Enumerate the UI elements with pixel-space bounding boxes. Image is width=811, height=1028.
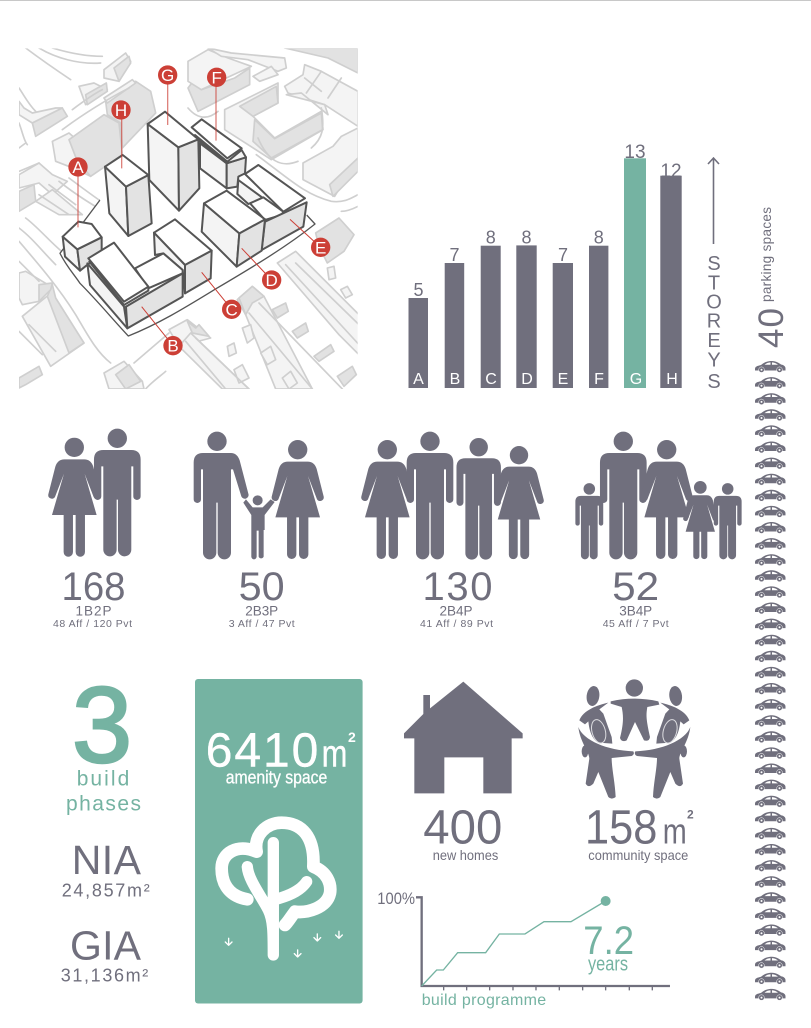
stat: 2B4P: 41 Aff / 89 Pvt [420, 618, 493, 630]
icon: house [404, 682, 523, 793]
stat: 1B2P: 1B2P [76, 604, 112, 619]
leader lines [78, 75, 321, 346]
bar chart: storeys per block: 7 [449, 245, 460, 265]
bar chart: storeys per block: H [666, 371, 678, 388]
bar chart: storeys per block: F [594, 371, 604, 388]
bar chart: storeys per block: G [630, 371, 642, 388]
bar chart: storeys per block: D [521, 371, 533, 388]
site boundary [60, 140, 315, 336]
stat: NIA: NIA [72, 837, 142, 883]
stat: 1B2P: 168 [62, 565, 126, 609]
block F [192, 119, 246, 188]
pin A: A [72, 158, 84, 177]
arrow: storeys axis [708, 158, 719, 244]
heading: amenity area: m [322, 734, 347, 776]
stat: new homes: 400 [423, 801, 502, 854]
heading: amenity area: amenity space [226, 767, 327, 787]
stat: 3B4P: 3B4P [619, 604, 652, 619]
stat: 3B4P [603, 565, 669, 630]
pin H [111, 100, 131, 120]
label: storeys: E [707, 330, 721, 352]
icon column: 40 cars [755, 361, 786, 1000]
heading: amenity area: 2 [348, 729, 356, 745]
pin C [222, 300, 241, 319]
block D [202, 191, 265, 267]
pin G [158, 65, 177, 85]
icon: sharers 2B4P [361, 432, 544, 560]
label: storeys: O [706, 292, 722, 314]
icon: community circle [578, 679, 690, 799]
block C [154, 219, 212, 293]
pin F [207, 68, 226, 87]
pin H: H [115, 101, 127, 120]
label: storeys [706, 253, 722, 393]
proposed blocks [63, 112, 307, 328]
icon: family 2B3P [194, 432, 324, 559]
pin D: D [266, 271, 278, 290]
chart: build programme: 7.2 [583, 919, 634, 963]
stat: new homes: new homes [433, 847, 498, 863]
bar chart: storeys per block: 8 [594, 228, 604, 248]
block G [148, 112, 199, 211]
block H [105, 155, 152, 236]
parking count: parking spaces [759, 207, 774, 302]
context streets and buildings [19, 48, 359, 389]
icon: tree [222, 823, 342, 957]
stat: 3B4P: 52 [612, 565, 659, 609]
stat: community space: m [663, 810, 687, 851]
stat: GIA: 31,136m² [61, 966, 148, 986]
stat: 2B3P [229, 565, 295, 630]
stat: build phases: phases [66, 793, 141, 816]
bar chart: storeys per block [408, 142, 682, 388]
stat: 1B2P [53, 565, 132, 630]
bar chart: storeys per block: 8 [486, 228, 496, 248]
heading: amenity area [206, 725, 356, 787]
progress line [422, 896, 611, 986]
pin C: C [226, 300, 238, 319]
stat: 3B4P: 45 Aff / 7 Pvt [603, 618, 669, 630]
stat: 2B3P: 3 Aff / 47 Pvt [229, 618, 295, 630]
stat: community space: 158 [585, 801, 657, 854]
pin B [163, 336, 183, 356]
block A [63, 222, 102, 271]
bar chart: storeys per block: 12 [660, 161, 682, 182]
parking count: 40 [752, 308, 791, 348]
chart: build programme [377, 889, 670, 1009]
chart axes [416, 897, 670, 990]
stat: 2B4P: 130 [422, 565, 492, 609]
stat: community space: 2 [687, 807, 694, 821]
icon: child holding hands [243, 495, 275, 559]
bar chart: storeys per block: 5 [413, 280, 424, 300]
stat: 2B3P: 50 [239, 565, 285, 609]
icon: family 3B4P [575, 432, 742, 559]
label: storeys: Y [707, 350, 721, 372]
label: storeys: T [708, 272, 720, 294]
stat: GIA [61, 922, 148, 986]
bar chart: storeys per block: C [485, 371, 497, 388]
stat: build phases: build [77, 768, 129, 791]
stat: build phases: 3 [72, 664, 132, 785]
stat: 2B3P: 2B3P [245, 604, 278, 619]
pin F: F [211, 68, 222, 87]
panel: massing map [19, 48, 359, 389]
block E [237, 165, 307, 250]
stat: 2B4P: 2B4P [440, 604, 472, 619]
heading: amenity area: 6410 [206, 725, 318, 778]
label: storeys: S [707, 371, 721, 393]
pin E: E [315, 238, 326, 257]
icon: couple 1B2P [48, 429, 141, 557]
bar chart: storeys per block: B [450, 371, 460, 388]
stat: NIA: 24,857m² [62, 881, 150, 901]
stat: community space [585, 801, 694, 863]
panel: amenity space [195, 679, 363, 1004]
pin A [68, 157, 88, 177]
bar chart: storeys per block: A [413, 371, 424, 388]
bar chart: storeys per block: 7 [558, 245, 568, 265]
chart: build programme: 100% [377, 889, 415, 908]
pin B: B [167, 337, 179, 356]
stat: 2B4P [420, 565, 493, 630]
label: storeys: S [707, 253, 721, 275]
stat: GIA: GIA [70, 922, 142, 968]
stat: NIA [62, 837, 150, 901]
parking count [752, 207, 791, 348]
pin G: G [161, 66, 174, 85]
pin D [262, 270, 281, 290]
bar chart: storeys per block: 13 [624, 142, 646, 163]
chart: build programme: years [588, 954, 628, 976]
pin E [311, 238, 330, 257]
label: storeys: R [707, 310, 721, 332]
chart: build programme: build programme [422, 992, 546, 1009]
stat: build phases [66, 664, 141, 816]
stat: community space: community space [588, 847, 688, 863]
bar chart: storeys per block: 8 [521, 228, 532, 248]
bar chart: storeys per block: E [558, 371, 568, 388]
block B [87, 243, 183, 328]
stat: 1B2P: 48 Aff / 120 Pvt [53, 618, 132, 630]
